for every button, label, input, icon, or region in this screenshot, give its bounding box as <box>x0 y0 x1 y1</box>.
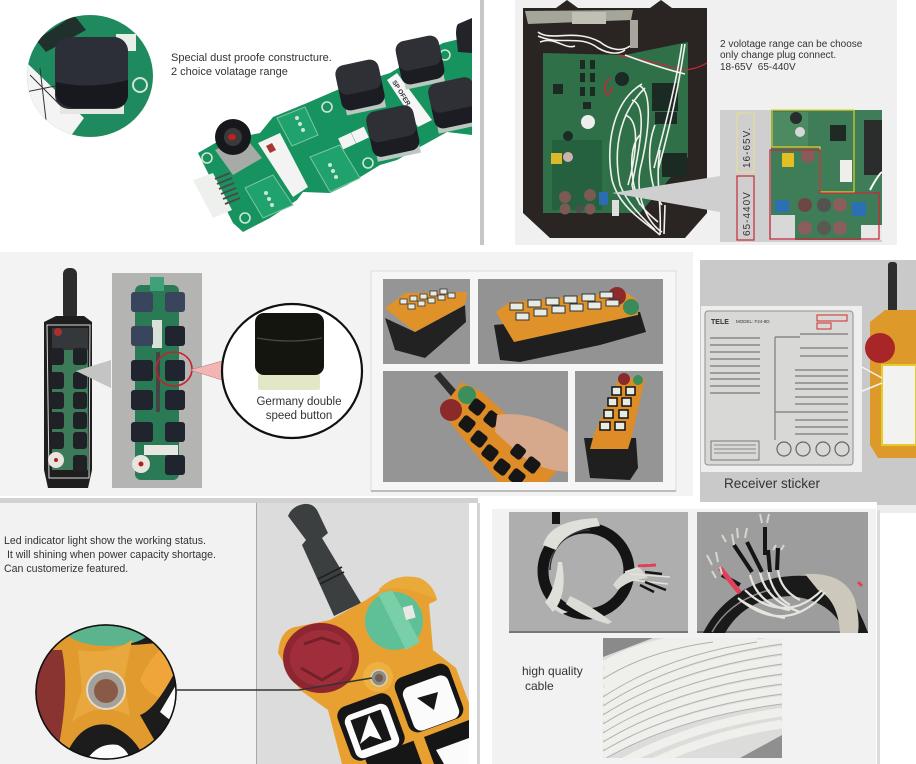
callout wedge <box>612 176 720 212</box>
photo: remote upright <box>575 371 663 482</box>
voltage inset <box>720 110 882 242</box>
soft band under receiver panel <box>877 505 916 513</box>
label: 16-65V: 16-65V. <box>742 127 753 168</box>
inset circle: button close-up <box>26 15 154 137</box>
label: 65-440V <box>737 176 754 240</box>
receiver enclosure <box>523 0 707 238</box>
sticker highlight frame <box>701 306 862 472</box>
photo: remote angled small <box>383 279 470 364</box>
label: SP OFER <box>387 73 432 127</box>
photo: cable lugs <box>697 512 868 633</box>
panel: receiver box <box>515 0 897 245</box>
button caption: speed button <box>266 410 332 422</box>
LED description: Can customerize featured. <box>4 563 128 575</box>
divider bar <box>480 0 484 245</box>
panel: LED indicator <box>0 498 480 764</box>
leader line <box>175 678 372 690</box>
description text: 2 choice volatage range <box>171 66 288 78</box>
PCB with buttons <box>131 277 185 480</box>
cable caption: high quality <box>522 664 583 678</box>
voltage description: only change plug connect. <box>720 50 836 61</box>
remote with open cover <box>44 268 92 488</box>
grey callout wedge <box>76 360 111 388</box>
rubber buttons <box>334 18 482 162</box>
photo: remote angled wide <box>478 279 663 364</box>
magnified button circle <box>222 304 362 438</box>
white wire harness <box>538 32 685 235</box>
PCB board <box>198 36 472 232</box>
panel: receiver sticker <box>700 260 916 505</box>
photo: white cable bundle <box>603 638 782 764</box>
label: 16-65V <box>737 113 754 172</box>
receiver body <box>860 262 916 458</box>
connector <box>193 173 232 218</box>
photo: remote held in hand <box>383 371 568 490</box>
cable caption: cable <box>525 679 554 693</box>
panel: double speed button <box>0 252 693 496</box>
LED description <box>4 535 216 575</box>
pink callout wedge <box>190 361 222 380</box>
LED magnifier circle <box>36 610 176 760</box>
red highlight ring <box>156 352 192 386</box>
description text <box>171 52 332 78</box>
voltage description <box>720 39 863 73</box>
photo: black cable coil <box>509 512 688 633</box>
voltage description: 2 volotage range can be choose <box>720 39 863 50</box>
sticker caption: Receiver sticker <box>724 476 821 491</box>
photo collage frame <box>371 271 676 492</box>
description text: Special dust proofe constructure. <box>171 52 332 64</box>
sticker plate <box>705 311 853 465</box>
cable caption <box>522 664 583 693</box>
voltage description: 18-65V 65-440V <box>720 62 796 73</box>
label: SP OFER: SP OFER <box>390 79 411 107</box>
white part label <box>258 133 308 197</box>
button caption: Germany double <box>256 396 342 408</box>
remote PCB column <box>112 273 202 488</box>
label: 65-440V: 65-440V <box>742 191 753 236</box>
panel: dust proof PCB <box>27 15 472 232</box>
panel: high quality cable <box>484 502 880 764</box>
connector pins <box>215 173 240 204</box>
sticker plate: TELE <box>711 319 729 326</box>
LED description: Led indicator light show the working status. <box>4 535 206 547</box>
sticker plate: MODEL: F24-8D <box>736 319 770 324</box>
remote close-up <box>278 504 469 764</box>
button caption <box>256 396 342 422</box>
LED description: It will shining when power capacity shortage. <box>4 549 216 561</box>
joystick knob <box>215 119 262 175</box>
